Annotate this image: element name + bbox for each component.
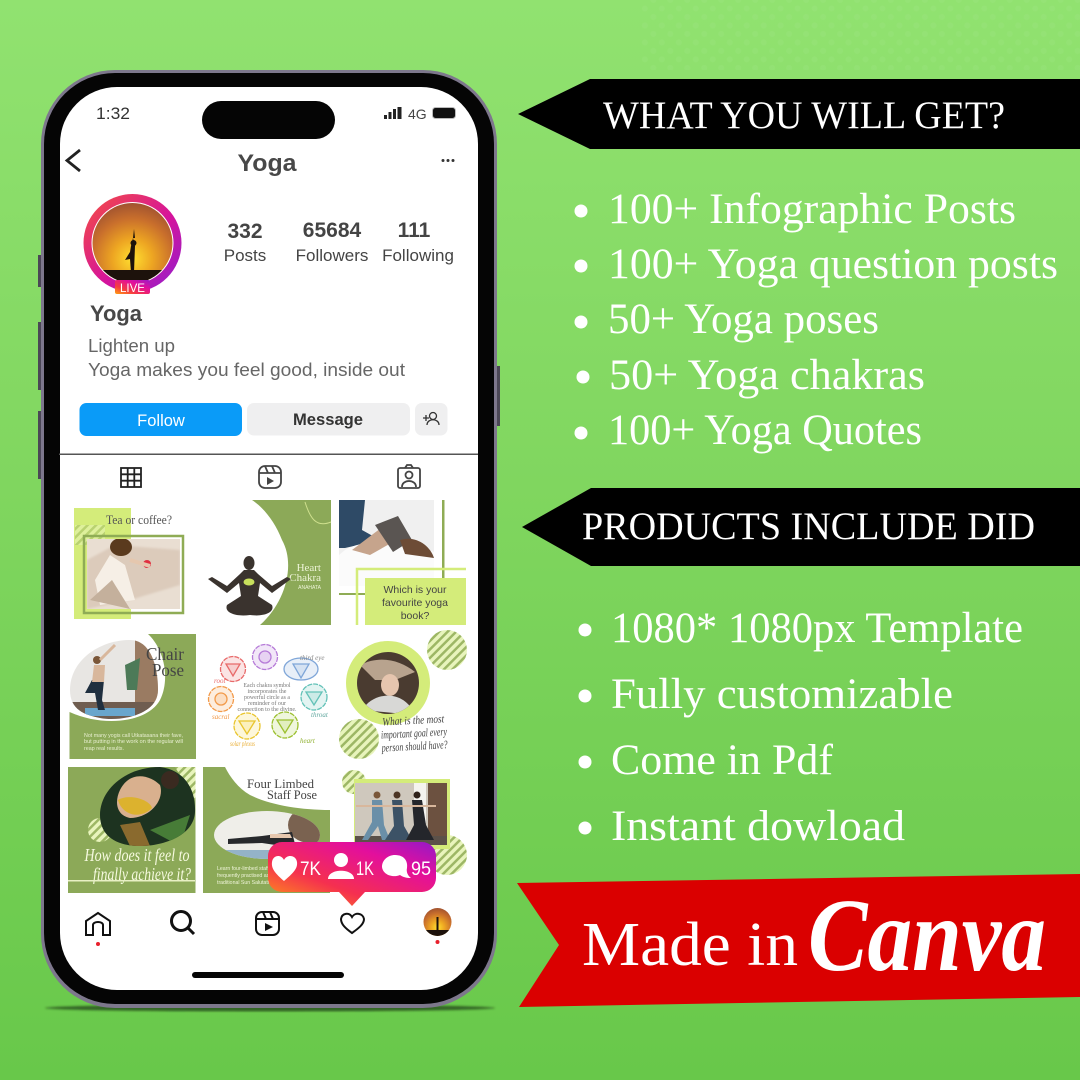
engagement badge: 7K xyxy=(300,859,321,880)
tile: chakra chart: throat xyxy=(311,711,329,719)
profile name: Yoga xyxy=(90,301,143,326)
tile: favourite yoga book xyxy=(339,500,466,625)
phone screen xyxy=(60,87,478,990)
engagement badge xyxy=(268,842,436,906)
tile: chakra chart: incorporates the xyxy=(248,689,287,695)
ribbon: made in canva: Canva xyxy=(808,878,1046,993)
tile: chair pose: Pose xyxy=(152,660,184,680)
tile: chakra chart: third eye xyxy=(300,654,324,662)
tile: favourite yoga book: Which is your xyxy=(383,584,447,596)
tile: four limbed staff pose: traditional Sun Salutation xyxy=(217,880,275,886)
tile: four limbed staff pose: Staff Pose xyxy=(267,788,317,802)
icon: comment xyxy=(382,855,411,878)
status icons xyxy=(384,106,456,122)
tab icon: reels xyxy=(259,466,281,488)
list: products include: Come in Pdf xyxy=(611,737,834,784)
list: products include: Instant dowload xyxy=(611,803,905,850)
phone xyxy=(38,70,500,1012)
tile: four limbed staff pose: frequently practised as xyxy=(217,873,270,879)
banner: products include: PRODUCTS INCLUDE DID xyxy=(582,505,1035,548)
avatar xyxy=(84,194,182,295)
phone shadow xyxy=(45,1004,495,1012)
add friend button xyxy=(415,403,448,436)
profile stats: Followers xyxy=(296,246,368,265)
tile: chakra chart: Each chakra symbol xyxy=(244,683,291,689)
phone side buttons xyxy=(38,255,500,479)
tile: heart chakra: Chakra xyxy=(289,572,321,584)
list: products include: 1080* 1080px Template xyxy=(611,605,1023,652)
tile: chakra chart: connection to the divine. xyxy=(238,707,297,713)
nav icon: reels xyxy=(256,912,279,935)
profile stats: 332 xyxy=(227,220,263,243)
nav icon: heart xyxy=(341,914,364,933)
list: what you will get xyxy=(574,186,1058,454)
avatar: LIVE xyxy=(120,281,145,295)
tile: heart chakra xyxy=(208,500,331,625)
tile: chair pose xyxy=(70,634,196,759)
tile: chakra chart: heart xyxy=(300,737,316,745)
tile: chair pose: but putting in the work on the regular will xyxy=(84,739,183,745)
list: products include: Fully customizable xyxy=(611,671,953,718)
nav icon: search xyxy=(172,912,194,934)
list: what you will get: 100+ Yoga question posts xyxy=(608,241,1058,288)
profile bio: Yoga makes you feel good, inside out xyxy=(88,360,405,380)
tile: chakra chart xyxy=(208,644,329,748)
profile stats: 65684 xyxy=(303,219,362,242)
follow button: Follow xyxy=(137,412,185,430)
tile: tea or coffee: Tea or coffee? xyxy=(106,513,172,527)
back arrow xyxy=(67,150,80,171)
tile: important goal: person should have? xyxy=(381,739,448,755)
tile: heart chakra: ANAHATA xyxy=(298,585,322,591)
tile: how does it feel: How does it feel to xyxy=(84,845,190,865)
profile stats xyxy=(224,219,454,265)
tile: favourite yoga book: favourite yoga xyxy=(382,597,448,609)
banner: what you will get: WHAT YOU WILL GET? xyxy=(603,94,1005,137)
tile: chair pose: reap real results. xyxy=(84,746,124,752)
status icons: 4G xyxy=(408,106,427,122)
tile: important goal: important goal every xyxy=(381,726,448,742)
list: what you will get: 100+ Yoga Quotes xyxy=(608,407,922,454)
profile stats: Posts xyxy=(224,246,266,265)
nav dot: home xyxy=(96,942,100,946)
banner: products include xyxy=(522,488,1080,566)
message button xyxy=(247,403,410,436)
tile: chakra chart: sacral xyxy=(212,713,230,721)
tile: chair pose: Not many yogis call Utkatasana their fave, xyxy=(84,733,183,739)
phone body xyxy=(41,70,497,1008)
icon: heart xyxy=(272,856,297,881)
tile: tea or coffee xyxy=(74,508,183,619)
profile bio xyxy=(88,336,405,380)
tile: how does it feel xyxy=(68,767,196,893)
ribbon: made in canva: Made in xyxy=(582,911,798,979)
engagement badge: 95 xyxy=(411,859,431,880)
list: what you will get: 50+ Yoga poses xyxy=(608,296,879,343)
tile: chakra chart: root xyxy=(214,677,226,685)
tile: heart chakra: Heart xyxy=(297,562,321,574)
tile: chair pose: Chair xyxy=(146,644,184,664)
tile: important goal xyxy=(339,630,467,759)
banner: what you will get xyxy=(518,79,1080,149)
message button: Message xyxy=(293,411,363,429)
profile bio: Lighten up xyxy=(88,336,175,356)
tile: favourite yoga book: book? xyxy=(401,610,429,622)
follow button xyxy=(80,403,242,436)
tab icon: tagged xyxy=(398,465,420,488)
tile: chakra chart: reminder of our xyxy=(248,700,286,707)
tile: chakra chart: solar plexus xyxy=(230,740,255,748)
tile: important goal: What is the most xyxy=(382,713,445,729)
home indicator xyxy=(192,972,344,978)
engagement badge: 1K xyxy=(356,859,374,880)
list: what you will get: 100+ Infographic Posts xyxy=(608,186,1016,233)
profile stats: 111 xyxy=(398,219,431,242)
ribbon: made in canva xyxy=(517,874,1080,1007)
profile stats: Following xyxy=(382,246,454,265)
tile: how does it feel: finally achieve it? xyxy=(93,864,191,884)
tab icon: grid xyxy=(121,468,141,487)
nav avatar xyxy=(424,908,452,936)
tile: chakra chart: powerful circle as a xyxy=(244,694,290,701)
icon: person xyxy=(328,853,354,879)
tile: group yoga xyxy=(342,770,467,875)
tile: four limbed staff pose: Learn four-limbed staff xyxy=(217,866,269,872)
list: what you will get: 50+ Yoga chakras xyxy=(609,352,925,399)
tile: four limbed staff pose: Four Limbed xyxy=(247,777,315,791)
more dots xyxy=(442,159,454,162)
profile title: Yoga xyxy=(238,150,297,177)
yoga silhouette xyxy=(208,556,291,615)
dynamic island xyxy=(202,101,335,139)
tile: four limbed staff pose xyxy=(203,767,332,893)
list: products include xyxy=(578,605,1023,850)
status time: 1:32 xyxy=(96,104,130,123)
nav icon: home xyxy=(86,913,110,935)
nav dot: profile xyxy=(436,940,440,944)
